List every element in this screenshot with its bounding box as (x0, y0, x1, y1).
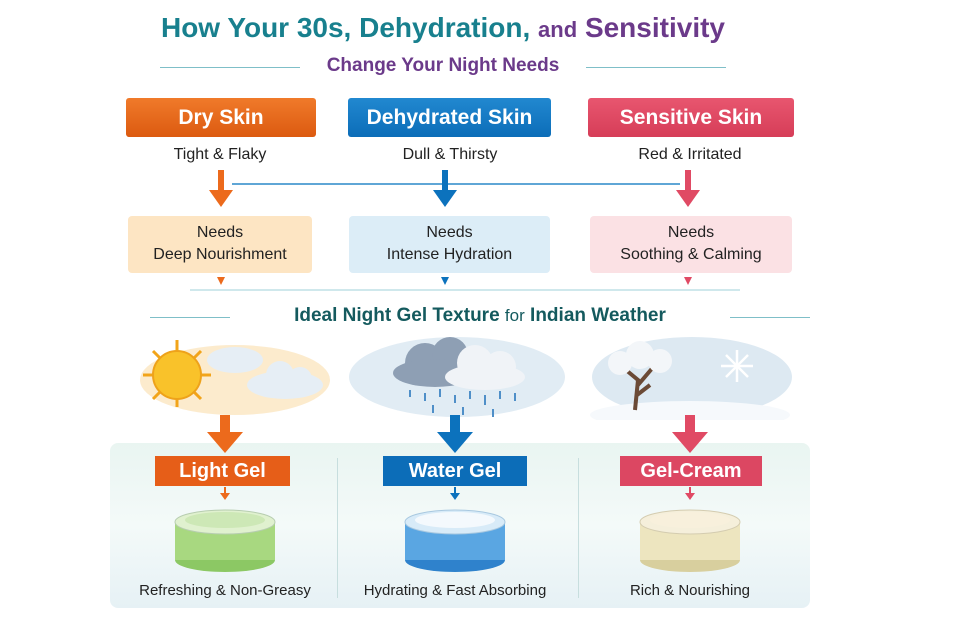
header: dehydrated skin (348, 98, 551, 137)
subtitle: Change Your Night Needs (327, 55, 559, 76)
text: Needs (668, 224, 714, 241)
icon: rainy weather (349, 337, 565, 417)
captions (139, 582, 750, 599)
symptom texts: Red & Irritated (638, 146, 742, 163)
header: dry skin: Dry Skin (178, 106, 264, 129)
bottom panel (110, 443, 810, 608)
need boxes (128, 216, 312, 273)
arrows and connector (190, 170, 740, 291)
label: water gel (383, 456, 527, 486)
big arrows (207, 415, 708, 500)
icon: jars (174, 510, 740, 572)
icon: winter weather (590, 337, 792, 420)
header: sensitive skin: Sensitive Skin (620, 106, 762, 129)
need boxes: Deep Nourishment (153, 246, 287, 263)
captions: Hydrating & Fast Absorbing (364, 582, 546, 599)
label: light gel (155, 456, 290, 486)
symptom texts (174, 146, 742, 163)
section heading: Ideal Night Gel Texture for Indian Weather (294, 305, 666, 326)
header: dry skin (126, 98, 316, 137)
label: light gel: Light Gel (179, 460, 266, 482)
title: How Your 30s, Dehydration, and Sensitivity (161, 12, 725, 43)
label: gel-cream (620, 456, 762, 486)
label: gel-cream: Gel-Cream (640, 460, 742, 482)
header: sensitive skin (588, 98, 794, 137)
header: dehydrated skin: Dehydrated Skin (367, 106, 532, 129)
symptom texts: Dull & Thirsty (403, 146, 497, 163)
text: Intense Hydration (387, 246, 512, 263)
need boxes: Needs (197, 224, 243, 241)
icon: sunny weather (140, 340, 330, 415)
label: water gel: Water Gel (409, 460, 501, 482)
text: Needs (426, 224, 473, 241)
text: Soothing & Calming (620, 246, 762, 263)
symptom texts: Tight & Flaky (174, 146, 266, 163)
captions: Refreshing & Non-Greasy (139, 582, 311, 599)
captions: Rich & Nourishing (630, 582, 750, 599)
